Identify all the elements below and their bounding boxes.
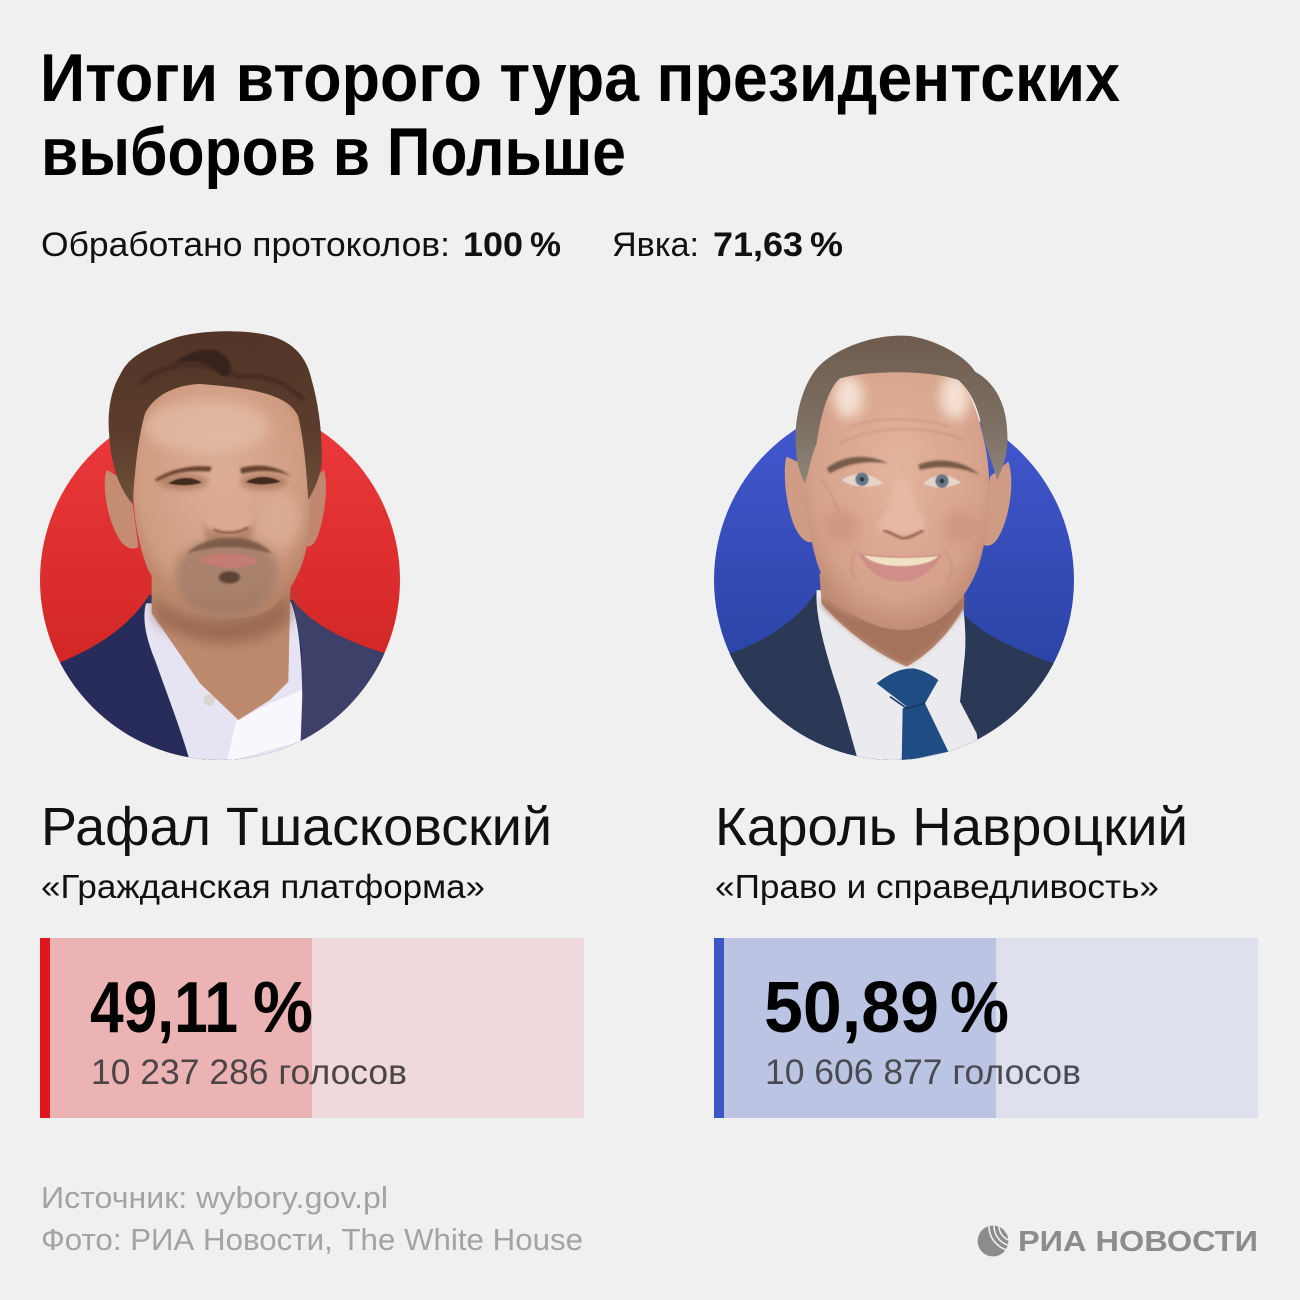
title: выборов в Польше <box>41 114 626 190</box>
brows <box>827 457 888 473</box>
party: «Гражданская платформа» <box>41 868 485 905</box>
stats line: Обработано протоколов: <box>41 226 450 264</box>
stats line: 100 <box>463 226 523 264</box>
title: Итоги второго тура президентских <box>40 40 1120 116</box>
face <box>133 377 310 618</box>
ears <box>785 457 813 542</box>
goatee <box>219 571 240 583</box>
party: «Право и справедливость» <box>715 868 1159 905</box>
source note: Источник: wybory.gov.pl <box>41 1180 388 1215</box>
result bar: Trzaskowski <box>40 938 584 1118</box>
neck <box>819 573 964 667</box>
candidate: Trzaskowski <box>41 797 552 905</box>
blue circle background <box>714 400 1074 760</box>
logo: RIA Novosti <box>978 1226 1256 1256</box>
votes: 10 237 286 голосов <box>91 1053 407 1092</box>
stats line: % <box>530 226 561 264</box>
wrinkles <box>820 419 963 580</box>
name: Кароль Навроцкий <box>715 797 1188 857</box>
ears <box>105 470 138 549</box>
forehead light <box>143 400 270 453</box>
votes: 10 606 877 голосов <box>765 1053 1081 1092</box>
mouth <box>858 553 943 582</box>
result bar: Nawrocki <box>714 938 1258 1118</box>
nose <box>205 477 253 532</box>
wordmark: РИА НОВОСТИ <box>1018 1226 1258 1258</box>
jacket <box>60 595 384 760</box>
shirt <box>816 590 980 762</box>
shirt <box>144 602 302 762</box>
beard <box>175 538 278 618</box>
source note: Фото: РИА Новости, The White House <box>41 1222 583 1257</box>
eye sockets shade <box>158 473 287 542</box>
hair <box>796 336 1007 483</box>
neck <box>152 573 291 720</box>
forehead highlights <box>833 373 970 420</box>
cheeks <box>823 510 978 543</box>
tie <box>877 668 948 762</box>
percent: 49,11 <box>90 968 238 1048</box>
face <box>806 353 989 630</box>
hair <box>109 331 322 504</box>
portrait: Trzaskowski <box>40 331 407 767</box>
nose <box>878 480 927 536</box>
brows <box>155 466 212 482</box>
percent: % <box>950 968 1009 1048</box>
eyes <box>168 478 202 485</box>
title <box>40 40 1120 190</box>
portrait: Nawrocki <box>710 336 1077 767</box>
red circle background <box>40 400 400 760</box>
stats line: % <box>810 226 843 264</box>
lips <box>199 553 260 568</box>
stats line: Явка: <box>612 226 699 264</box>
stats line <box>41 226 843 264</box>
percent: 50,89 <box>764 968 939 1048</box>
jacket <box>730 590 1054 760</box>
cheek highlight <box>260 493 300 547</box>
percent: % <box>253 968 313 1048</box>
icon: globe <box>978 1226 1008 1256</box>
eyes <box>842 473 961 488</box>
name: Рафал Тшасковский <box>41 797 552 857</box>
source note <box>41 1180 583 1257</box>
stats line: 71,63 <box>713 226 803 264</box>
candidate: Nawrocki <box>715 797 1188 905</box>
